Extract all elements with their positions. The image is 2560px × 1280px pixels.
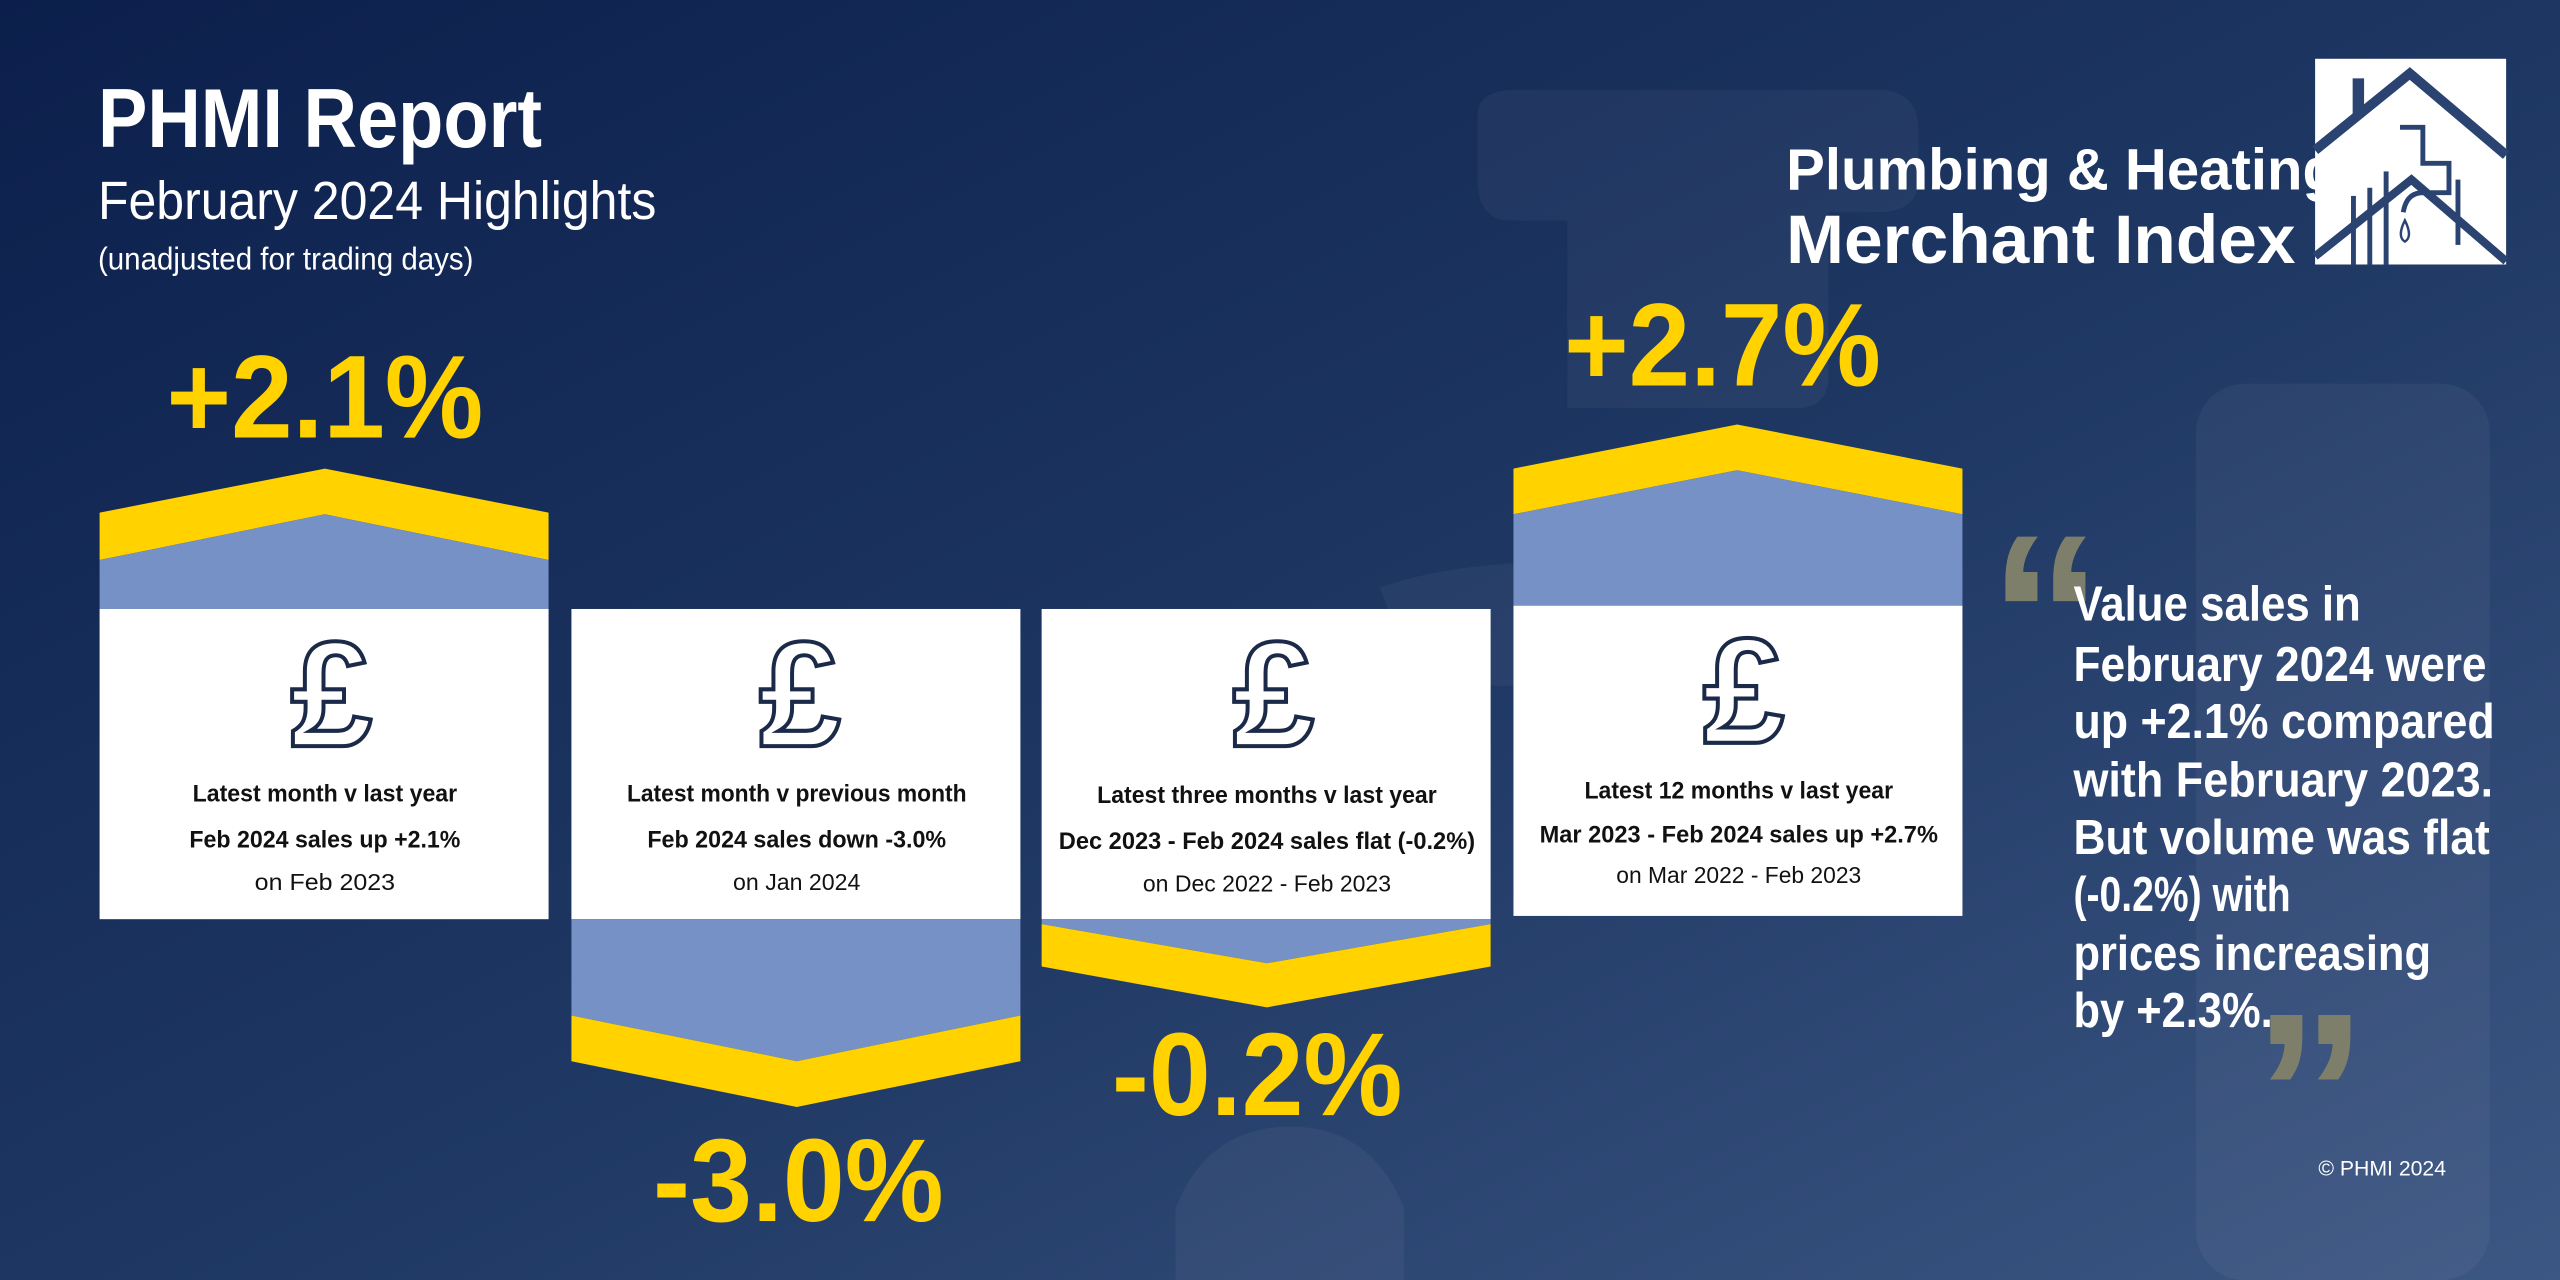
card 1: latest month v last year: Feb 2024 sales up +2.1% xyxy=(189,826,461,853)
card 4: latest 12 months v last year: Latest 12 months v last year xyxy=(1584,777,1894,804)
quote text: with February 2023. xyxy=(2073,754,2493,808)
card 3: latest three months v last year: £ xyxy=(1233,610,1314,778)
title: PHMI Report xyxy=(98,72,542,165)
card 2: latest month v previous month: Latest month v previous month xyxy=(627,781,967,808)
copyright: © PHMI 2024 xyxy=(2318,1158,2446,1181)
card 4: latest 12 months v last year: £ xyxy=(1703,607,1784,775)
card 3: latest three months v last year: on Dec 2022 - Feb 2023 xyxy=(1143,870,1391,896)
card 4: latest 12 months v last year: +2.7% xyxy=(1564,279,1881,410)
card 1: latest month v last year: Latest month v last year xyxy=(193,781,458,808)
card 3: latest three months v last year: -0.2% xyxy=(1112,1009,1402,1140)
background decorative pipes xyxy=(1176,90,2490,1280)
card 2: latest month v previous month: £ xyxy=(759,610,841,778)
card 2: latest month v previous month: -3.0% xyxy=(653,1115,944,1246)
icon: open quote: “ xyxy=(1989,488,2103,743)
card 1: latest month v last year: £ xyxy=(291,610,372,778)
card 1: latest month v last year: +2.1% xyxy=(167,332,483,463)
logo xyxy=(1786,59,2506,278)
card 2: latest month v previous month: on Jan 2024 xyxy=(733,869,861,895)
card 2: latest month v previous month xyxy=(571,609,1020,1246)
logo: Plumbing & Heating xyxy=(1786,137,2338,202)
card 4: latest 12 months v last year: Mar 2023 - Feb 2024 sales up +2.7% xyxy=(1540,821,1938,848)
card 3: latest three months v last year: Dec 2023 - Feb 2024 sales flat (-0.2%) xyxy=(1059,828,1475,855)
title: (unadjusted for trading days) xyxy=(98,241,473,276)
quote text: prices increasing xyxy=(2073,927,2431,981)
quote text: up +2.1% compared xyxy=(2073,695,2495,749)
quote text: February 2024 were xyxy=(2073,638,2487,692)
card 1: latest month v last year xyxy=(100,332,549,919)
quote text: (-0.2%) with xyxy=(2073,868,2291,922)
icon: close quote: ” xyxy=(2253,966,2367,1221)
icon: house with tap xyxy=(2315,59,2506,264)
card 4: latest 12 months v last year: on Mar 2022 - Feb 2023 xyxy=(1616,862,1861,888)
card 3: latest three months v last year xyxy=(1042,609,1491,1140)
card 4: latest 12 months v last year xyxy=(1513,279,1962,916)
quote text xyxy=(2073,577,2495,1038)
quote text: But volume was flat xyxy=(2073,811,2490,865)
quote text: by +2.3%. xyxy=(2073,984,2273,1038)
card 1: latest month v last year: on Feb 2023 xyxy=(255,869,395,895)
card 2: latest month v previous month: Feb 2024 sales down -3.0% xyxy=(647,826,946,853)
title: February 2024 Highlights xyxy=(98,171,656,231)
title xyxy=(98,72,656,276)
logo: Merchant Index xyxy=(1786,201,2296,278)
card 3: latest three months v last year: Latest three months v last year xyxy=(1097,782,1437,809)
quote xyxy=(1989,488,2495,1038)
quote text: Value sales in xyxy=(2073,577,2361,631)
